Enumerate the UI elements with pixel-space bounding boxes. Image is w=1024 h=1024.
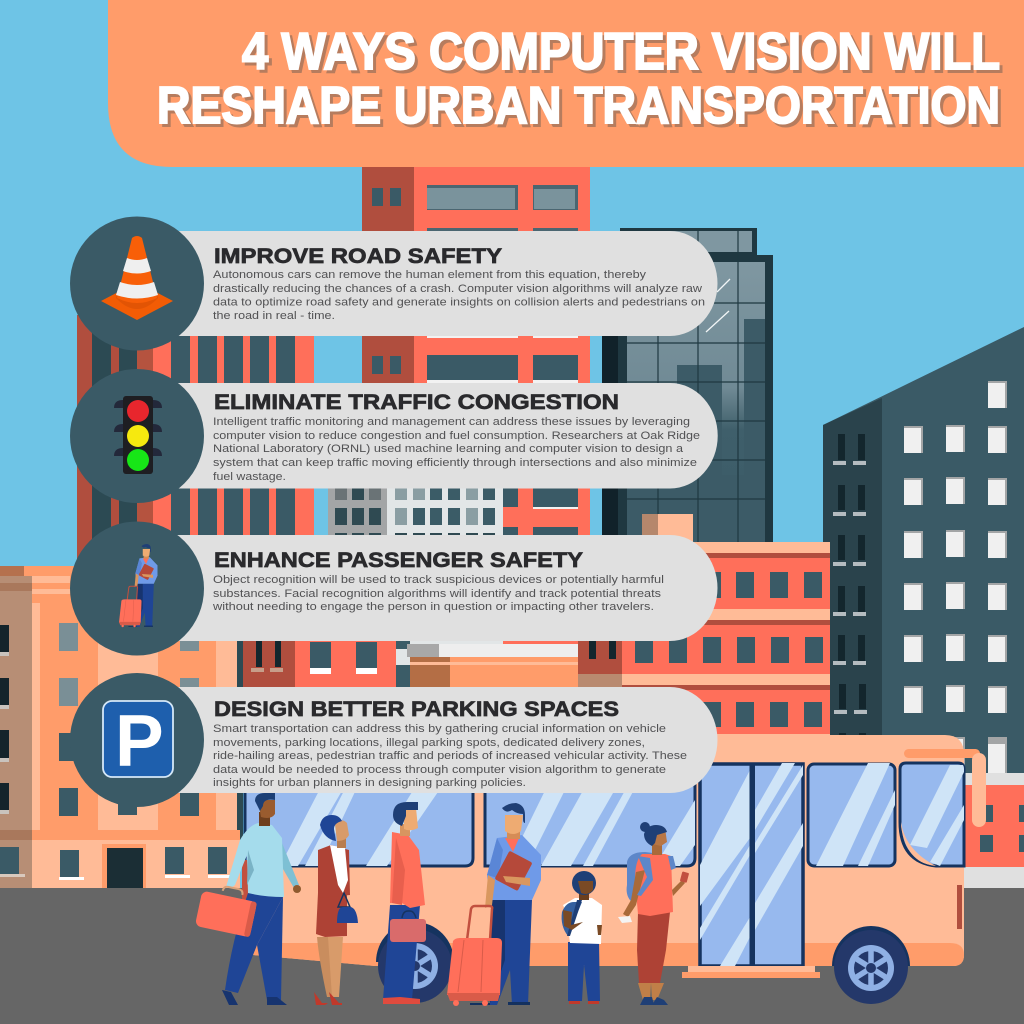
text block: drastically reducing the chances of a crash. Computer vision algorithms will analyze raw [213, 283, 703, 295]
person: man with teal shirt [195, 793, 301, 1005]
building: dark slanted block on right [823, 327, 1024, 775]
bus window 3 [808, 763, 895, 866]
text block: data would be needed to process through computer vision algorithm to generate [213, 764, 666, 776]
bus mirror [904, 749, 986, 827]
text block: movements, parking locations, illegal parking spots, dedicated delivery zones, [213, 737, 645, 749]
text block: Smart transportation can address this by gathering crucial information on vehicle [213, 723, 666, 735]
text block: insights for urban planners in designing parking policies. [213, 777, 526, 789]
text block: Autonomous cars can remove the human element from this equation, thereby [213, 269, 646, 281]
wheel: rear [376, 922, 454, 1003]
panel: enhance passenger safety [150, 535, 718, 641]
bus window 2 [484, 784, 696, 868]
bus [245, 735, 986, 1004]
building: coral block mid right [622, 514, 830, 744]
building: pale block [387, 480, 503, 690]
panel: design better parking spaces [150, 687, 718, 793]
bus door step [682, 966, 820, 978]
person: child with backpack [562, 871, 602, 1004]
person: man with tablet and suitcase [447, 803, 541, 1006]
text block: computer vision to reduce congestion and fuel consumption. Researchers at Oak Ridge [213, 430, 700, 442]
person: woman in red [314, 815, 358, 1005]
building: tall striped red tower [77, 315, 314, 605]
text block [213, 269, 705, 322]
icon: traveller with suitcase [70, 522, 204, 656]
building: low coral block behind bus on right [960, 773, 1024, 888]
text block: without needing to engage the person in question or impacting other travelers. [212, 601, 654, 613]
bus window 4 [900, 763, 965, 866]
text block: system that can keep traffic moving efficiently through intersections and also minimize [213, 457, 697, 469]
text block: National Laboratory (ORNL) used machine learning and computer vision to design a [213, 443, 684, 455]
panel: improve road safety [150, 231, 718, 336]
icon: traffic light [70, 369, 204, 503]
heading: ELIMINATE TRAFFIC CONGESTION [214, 390, 619, 414]
text block: substances. Facial recognition algorithms will identify and track potential threats [213, 588, 661, 600]
icon: traffic cone [70, 216, 204, 350]
bus window 1 [244, 793, 474, 868]
heading: ENHANCE PASSENGER SAFETY [214, 548, 583, 572]
wheel: front [832, 926, 910, 1004]
text block: data to optimize road safety and generate insights on collision alerts and pedestrians on [213, 296, 705, 308]
building: grey block [328, 480, 387, 560]
text block: Object recognition will be used to track suspicious devices or potentially harmful [213, 574, 664, 586]
building: glass tower [602, 228, 773, 550]
text block: fuel wastage. [213, 471, 286, 483]
icon: parking sign: P [115, 701, 164, 782]
heading: IMPROVE ROAD SAFETY [214, 244, 502, 268]
bus door [700, 763, 803, 966]
building: orange block on left [0, 566, 240, 888]
person: woman with backpack and phone [618, 822, 689, 1005]
text block [213, 416, 700, 483]
icon: parking sign [70, 673, 204, 807]
text block: ride-hailing areas, pedestrian traffic and periods of increased vehicular activity. These [213, 750, 687, 762]
building: lower middle blocks [230, 620, 622, 850]
bus rear light [957, 885, 962, 929]
text block: Intelligent traffic monitoring and management can address these issues by leveraging [213, 416, 690, 428]
title banner [108, 0, 1024, 167]
heading: DESIGN BETTER PARKING SPACES [214, 697, 619, 721]
text block [212, 574, 664, 613]
person: man in coral shirt [383, 802, 426, 1004]
title text [157, 23, 1000, 135]
panel: eliminate traffic congestion [150, 383, 718, 488]
text block: the road in real - time. [213, 310, 335, 322]
building: central coral tower [362, 167, 590, 650]
windows: dark block grid [904, 381, 1007, 774]
text block [213, 723, 687, 789]
road [0, 888, 1024, 1024]
suitcase [195, 882, 259, 937]
